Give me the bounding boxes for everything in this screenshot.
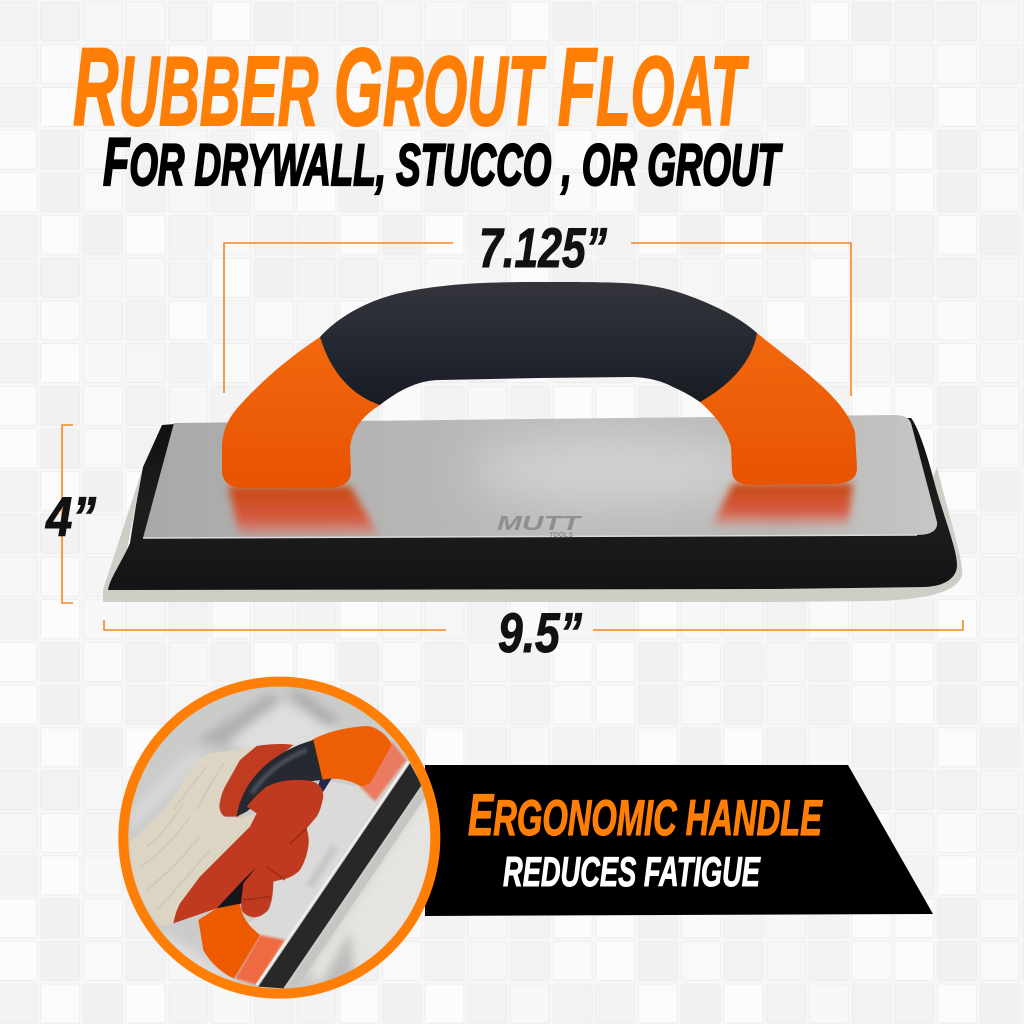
photo inset: gloved hand gripping float: [117, 677, 443, 1003]
float: brand mark: TOOLS: [549, 532, 573, 539]
float: brand mark: [497, 513, 583, 539]
photo: grip highlight: [252, 750, 307, 793]
photo: orange handle foot lower: [198, 903, 260, 978]
photo: orange handle foot upper: [312, 726, 392, 787]
photo: orange ring: [123, 682, 435, 994]
product: grout float: [103, 282, 962, 602]
title: RUBBER GROUT FLOAT: [73, 26, 749, 149]
dimension: length 9.5 in: 9.5”: [498, 601, 582, 664]
photo: orange reflections: [235, 742, 407, 985]
dimension: length 9.5 in: [104, 601, 963, 664]
photo: red index finger: [219, 744, 293, 817]
photo: plate logo: [309, 847, 335, 887]
float: plate sheen and reflections: [228, 438, 853, 537]
dimension: height 4 in: 4”: [45, 485, 96, 548]
banner heading: ERGONOMIC HANDLE: [468, 783, 823, 848]
photo: gray strip: [302, 790, 425, 977]
handle: right orange foot: [700, 333, 857, 485]
photo: float plate: [248, 772, 398, 945]
photo: finger shadows: [243, 828, 307, 900]
photo: black grip: [237, 740, 323, 817]
float: metal plate: [143, 415, 937, 538]
float: plate front edge: [143, 535, 917, 538]
dimension: handle width 7.125 in: [224, 216, 851, 396]
photo: red palm and fingers: [173, 780, 323, 923]
dimension: height 4 in: [45, 425, 96, 603]
photo: blurred wall: [130, 690, 437, 990]
handle: left orange foot: [222, 337, 380, 488]
handle: black grip: [310, 282, 775, 415]
photo: navy grip underside: [317, 778, 332, 792]
photo: black foam: [258, 763, 422, 988]
dimension: handle width 7.125 in: 7.125”: [479, 216, 607, 279]
float: black foam pad: [108, 418, 957, 590]
photo: cream glove: [130, 746, 257, 926]
banner subheading: REDUCES FATIGUE: [503, 848, 761, 895]
photo: plate edge: [257, 762, 408, 985]
float: brand mark: MUTT: [497, 513, 583, 535]
callout banner: ergonomic handle: [425, 765, 933, 916]
photo: glove weave: [140, 763, 223, 910]
float: gray rubber base: [103, 467, 962, 602]
